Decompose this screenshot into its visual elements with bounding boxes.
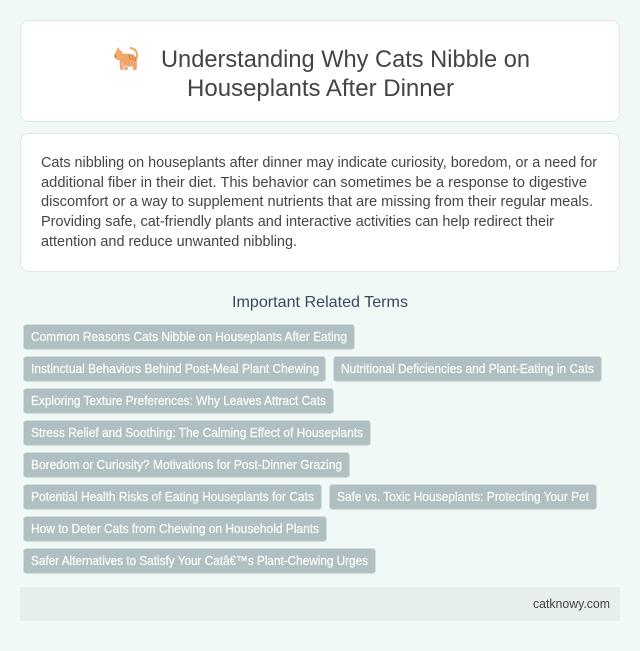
chip — [24, 452, 350, 478]
title: Houseplants After Dinner — [187, 75, 454, 102]
footer: catknowy.com — [533, 596, 610, 611]
title: Understanding Why Cats Nibble on — [161, 46, 530, 73]
chip — [330, 484, 596, 510]
heading: related terms: Important Related Terms — [232, 294, 408, 311]
chip: Instinctual Behaviors Behind Post-Meal Plant Chewing — [31, 361, 319, 376]
text block: description: discomfort or a way to supplement nutrients that are missing from their regular meals. — [41, 194, 593, 210]
panel: title card — [20, 20, 620, 122]
text block: description — [41, 155, 597, 250]
chip: Boredom or Curiosity? Motivations for Post-Dinner Grazing — [31, 457, 342, 472]
chip: Stress Relief and Soothing: The Calming Effect of Houseplants — [31, 425, 363, 440]
chip — [24, 516, 326, 542]
chip: Potential Health Risks of Eating Houseplants for Cats — [31, 489, 314, 504]
title — [161, 46, 530, 102]
text block: description: Cats nibbling on houseplants after dinner may indicate curiosity, boredom, or a need for — [41, 155, 597, 171]
chip — [24, 420, 370, 446]
chip — [24, 548, 376, 574]
chip: Safe vs. Toxic Houseplants: Protecting Your Pet — [337, 489, 589, 504]
chip: Common Reasons Cats Nibble on Houseplants After Eating — [31, 329, 347, 344]
chip: How to Deter Cats from Chewing on Household Plants — [31, 521, 319, 536]
text block: description: attention and reduce unwanted nibbling. — [41, 234, 297, 250]
chip: Safer Alternatives to Satisfy Your Catâ€™s Plant-Chewing Urges — [31, 553, 368, 568]
icon: cat — [114, 47, 137, 70]
chip — [24, 484, 322, 510]
chip — [24, 388, 334, 414]
chip: Exploring Texture Preferences: Why Leaves Attract Cats — [31, 393, 326, 408]
panel: description — [20, 134, 620, 272]
text block: description: additional fiber in their diet. This behavior can sometimes be a response to digestive — [41, 175, 587, 191]
footer — [20, 587, 620, 621]
chips: related terms — [24, 324, 602, 574]
chip — [24, 356, 326, 382]
chip — [334, 356, 602, 382]
text block: description: Providing safe, cat-friendly plants and interactive activities can help redirect their — [41, 214, 554, 230]
chip: Nutritional Deficiencies and Plant-Eating in Cats — [341, 361, 594, 376]
chip — [24, 324, 354, 350]
